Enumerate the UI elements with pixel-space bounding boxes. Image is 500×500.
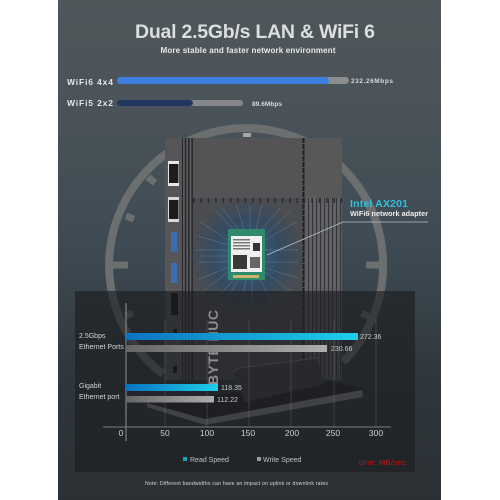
- circuit glow: [189, 197, 305, 313]
- divider line: [302, 138, 304, 380]
- bar: WiFi5: [117, 100, 243, 106]
- centre panel: [193, 198, 303, 380]
- WiFi comparison bars: [67, 77, 393, 108]
- axis labels: 150: [241, 428, 255, 438]
- bar values: 272.36: [360, 334, 382, 341]
- legend: Read Speed: [190, 457, 229, 464]
- leader line: [267, 222, 428, 255]
- top cover plates: [193, 133, 342, 198]
- network adapter card: [228, 229, 265, 280]
- bar values: 230.66: [331, 346, 353, 353]
- grid lines: [165, 320, 376, 427]
- category labels: [79, 333, 124, 401]
- bar: gigabit read: [126, 384, 218, 391]
- brand name: BYTE NUC: [205, 310, 221, 385]
- stand: [147, 358, 363, 425]
- callout: Intel AX201: [267, 198, 428, 255]
- subtitle: More stable and faster network environment: [160, 46, 336, 55]
- label: WiFi6 4x4: WiFi6 4x4: [67, 77, 113, 87]
- axis labels: 0: [119, 428, 124, 438]
- bar: 2.5G write: [126, 345, 327, 352]
- notches: [193, 198, 342, 203]
- title: Dual 2.5Gb/s LAN & WiFi 6: [135, 21, 375, 43]
- circuit traces: [196, 205, 298, 304]
- axis labels: 100: [200, 428, 214, 438]
- value: 232.26Mbps: 232.26Mbps: [351, 78, 393, 85]
- x axis: [103, 426, 391, 428]
- lower right fins: [305, 197, 342, 377]
- axis labels: 200: [285, 428, 299, 438]
- callout heading: Intel AX201: [350, 198, 408, 210]
- ports column: [168, 161, 179, 373]
- category labels: Ethernet Ports: [79, 344, 124, 351]
- left fins: [182, 138, 193, 380]
- footnote: Note: Different bandwidths can have an impact on uplink or downlink rates: [145, 481, 328, 487]
- callout description: WiFi6 network adapter: [350, 209, 428, 218]
- axis labels: 300: [369, 428, 383, 438]
- bar: gigabit write: [126, 396, 214, 402]
- background panel: [58, 0, 441, 500]
- legend: [183, 457, 301, 464]
- category labels: 2.5Gbps: [79, 333, 106, 340]
- bar values: 118.35: [221, 385, 242, 392]
- chart panel: [75, 291, 415, 472]
- bar values: [217, 334, 382, 404]
- bar: WiFi6: [117, 77, 349, 84]
- unit label: Unit: MB/sec: [359, 458, 406, 467]
- category labels: Gigabit: [79, 383, 101, 390]
- label: WiFi5 2x2: WiFi5 2x2: [67, 98, 113, 108]
- bar: 2.5G read: [126, 333, 358, 340]
- bar chart: [79, 303, 391, 441]
- legend: Write Speed: [263, 457, 301, 464]
- axis labels: 50: [160, 428, 170, 438]
- axis labels: [119, 428, 383, 438]
- category labels: Ethernet port: [79, 394, 120, 401]
- device body: [165, 138, 342, 380]
- value: 89.6Mbps: 89.6Mbps: [252, 101, 282, 108]
- mini PC device: [165, 133, 342, 380]
- bar values: 112.22: [217, 397, 238, 404]
- axis labels: 250: [326, 428, 340, 438]
- speedometer ring: [109, 128, 383, 374]
